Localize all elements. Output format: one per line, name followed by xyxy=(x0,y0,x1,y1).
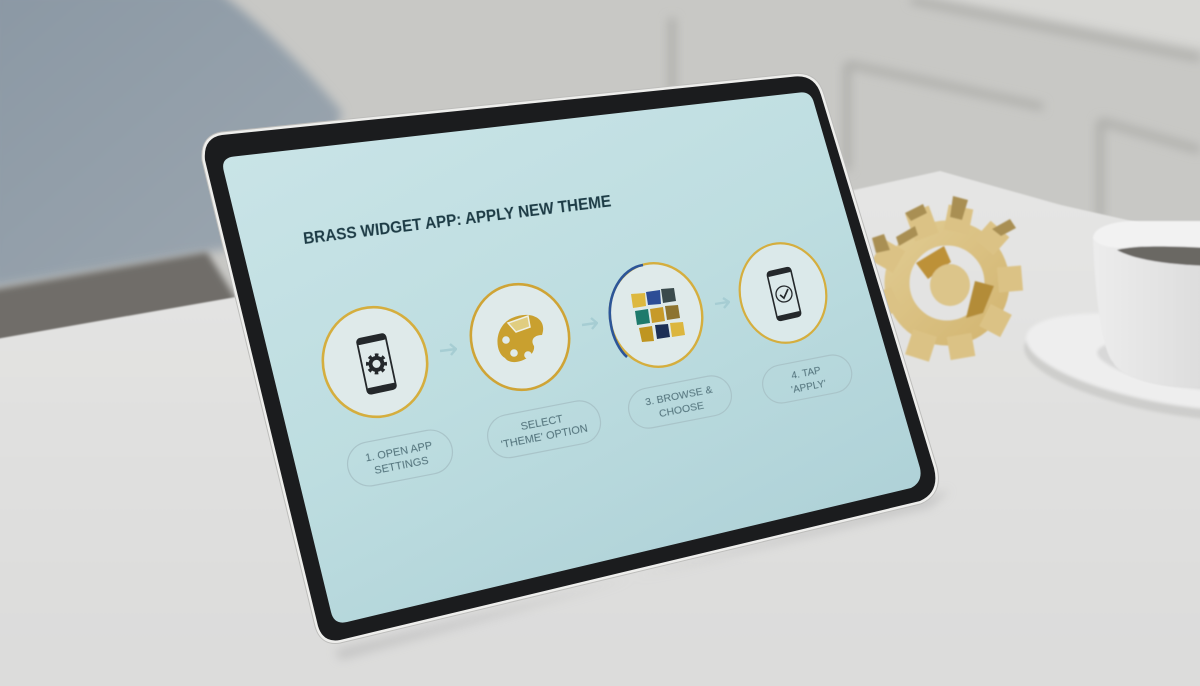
tablet bezel xyxy=(205,76,935,640)
icon: phone with check xyxy=(767,267,801,321)
step 4 circle xyxy=(731,235,835,351)
gear teeth xyxy=(878,207,1022,358)
step 3: browse and choose xyxy=(600,255,735,432)
step 1 label pill: SETTINGS xyxy=(373,455,430,477)
arrow 1 xyxy=(440,344,456,355)
step 1 label pill xyxy=(344,426,456,490)
step 4 label pill xyxy=(759,352,855,406)
step 3 label pill: CHOOSE xyxy=(658,400,705,420)
step 3 blue arc xyxy=(610,265,643,357)
step 2: select theme option xyxy=(461,275,604,461)
step 1 label pill: 1. OPEN APP xyxy=(364,440,433,464)
step 3 circle xyxy=(600,255,712,375)
tablet body edge xyxy=(205,76,935,640)
title: BRASS WIDGET APP: APPLY NEW THEME xyxy=(302,192,612,248)
step 4: tap apply xyxy=(731,235,855,406)
step 3 label pill: 3. BROWSE & xyxy=(644,384,714,409)
table surface xyxy=(0,171,1200,686)
step 2 label pill: 'THEME' OPTION xyxy=(500,423,589,451)
blurred chair xyxy=(0,0,342,350)
icon: phone with gear xyxy=(356,333,396,394)
step 2 label pill xyxy=(484,397,604,461)
tablet outer rim xyxy=(205,76,935,640)
step 1: open app settings xyxy=(311,296,456,490)
step 1 circle xyxy=(311,296,439,428)
coffee cup xyxy=(1093,221,1200,387)
tablet screen xyxy=(223,92,921,623)
step 4 label pill: 4. TAP xyxy=(791,365,822,382)
tablet xyxy=(205,76,950,660)
arrow 2 xyxy=(582,318,597,329)
step 4 label pill: 'APPLY' xyxy=(790,379,827,396)
tablet shadow xyxy=(335,490,950,660)
gear inner facets xyxy=(916,246,951,279)
icon: palette xyxy=(497,315,543,362)
arrow 3 xyxy=(715,298,729,308)
step 2 label pill: SELECT xyxy=(520,413,564,433)
brass gear xyxy=(872,196,1022,358)
step 3 label pill xyxy=(625,372,735,432)
icon: theme swatches xyxy=(631,288,685,342)
saucer xyxy=(1017,295,1200,439)
step 2 circle xyxy=(461,275,579,399)
